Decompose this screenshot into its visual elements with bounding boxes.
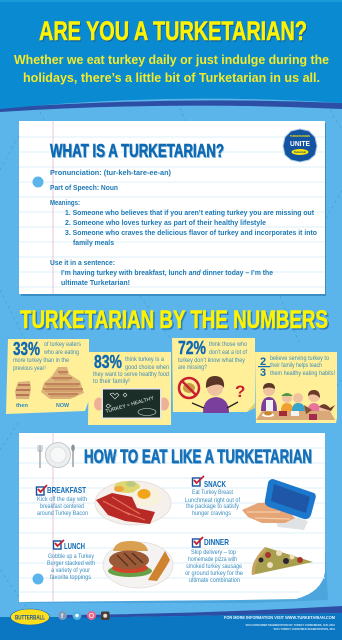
icon: no turkey sign xyxy=(179,378,199,398)
logo: butterball: BUTTERBALL xyxy=(15,614,45,622)
badge: turketarians unite: UNITE xyxy=(290,141,310,148)
lunch: favorite toppings xyxy=(50,574,91,581)
social icons xyxy=(58,611,110,620)
definition text: Meanings: xyxy=(50,198,80,207)
snack xyxy=(185,476,316,530)
logo: butterball xyxy=(10,609,50,625)
sticky note: 33%: who are eating xyxy=(43,349,79,356)
icon: large sandwich pile xyxy=(41,367,84,399)
sticky note: 83%: good choice when xyxy=(125,364,169,371)
sticky note: 33% xyxy=(6,339,89,414)
sticky note: 83%: to their family² xyxy=(93,378,130,385)
definition text: 3. Someone who craves the delicious flavor of turkey and incorporates it into xyxy=(65,228,317,237)
sticky note: 33%: 33% xyxy=(13,339,40,359)
sticky note: two thirds: their family helps teach xyxy=(270,362,322,369)
lunch: LUNCH xyxy=(64,541,85,551)
dinner: smoked turkey sausage xyxy=(186,563,242,570)
dinner: DINNER xyxy=(204,537,229,547)
fraction: 3 xyxy=(260,367,266,379)
breakfast: BREAKFAST xyxy=(47,485,87,495)
icon: checkbox xyxy=(192,537,203,547)
breakfast: Kick off the day with xyxy=(37,496,87,503)
lunch xyxy=(47,540,173,588)
labels: then and now: then xyxy=(16,403,28,409)
sticky note: 33%: more turkey than in the xyxy=(13,357,69,364)
sticky note: 83%: think turkey is a xyxy=(125,356,164,363)
definition text: I’m having turkey with breakfast, lunch and dinner today – I’m the xyxy=(61,268,273,277)
subtitle: holidays, there’s a little bit of Turketarian in us all. xyxy=(23,70,320,85)
sticky note: 33%: previous year¹ xyxy=(13,365,46,372)
snack: the package to satisfy xyxy=(186,503,239,510)
sticky note: 72%: think those who xyxy=(209,341,247,348)
icon: plate and cutlery xyxy=(38,442,75,468)
panel: what is a turketarian xyxy=(19,121,326,296)
header band xyxy=(0,0,342,112)
subtitle xyxy=(14,52,329,85)
lunch: Burger stacked with xyxy=(47,560,95,567)
labels: then and now: NOW xyxy=(56,403,69,409)
dinner xyxy=(185,537,313,584)
breakfast xyxy=(36,481,171,525)
photo: lunchmeat container xyxy=(242,479,316,530)
definition text: 1. Someone who believes that if you aren’t eating turkey you are missing out xyxy=(65,208,314,217)
footer text: ²2014 TURKEY CONSUMER SEGMENTATION, 2011 xyxy=(273,627,336,631)
definition text: Use it in a sentence: xyxy=(50,258,115,267)
definition text: Pronunciation: (tur-keh-tare-ee-an) xyxy=(50,168,171,177)
snack: hunger cravings xyxy=(192,510,231,517)
sticky note: two thirds: believe serving turkey to xyxy=(270,355,329,362)
sticky note: 72% xyxy=(172,338,255,413)
definition text: family meals xyxy=(73,238,114,247)
icon: checkbox xyxy=(192,476,204,486)
fraction xyxy=(258,356,270,379)
badge: turketarians unite: Butterball xyxy=(294,151,306,154)
sticky note: 72%: 72% xyxy=(178,338,206,358)
badge: turketarians unite: TURKETARIANS xyxy=(290,134,310,138)
snack: Lunchmeat right out of xyxy=(185,497,240,504)
sticky note: 83%: they want to serve healthy food xyxy=(93,371,169,378)
sticky note: 72%: are missing? xyxy=(178,364,207,371)
lunch: Gobble up a Turkey xyxy=(48,553,94,560)
dinner: Skip delivery – top xyxy=(191,549,236,556)
definition text: Part of Speech: Noun xyxy=(50,183,118,192)
sticky note: two thirds xyxy=(255,352,337,423)
subtitle: Whether we eat turkey daily or just indulge during the xyxy=(14,52,329,67)
definition text xyxy=(50,168,317,287)
sticky note: 83% xyxy=(88,352,171,425)
heading: WHAT IS A TURKETARIAN? xyxy=(50,141,224,161)
definition text: 2. Someone who loves turkey as part of their healthy lifestyle xyxy=(65,218,266,227)
sticky note: 72%: don’t eat a lot of xyxy=(209,349,247,356)
breakfast: breakfast centered xyxy=(40,503,84,510)
snack: SNACK xyxy=(204,479,227,489)
sticky note: 83%: 83% xyxy=(94,352,122,372)
heading: WHAT IS A TURKETARIAN? xyxy=(51,142,225,162)
lunch: a variety of your xyxy=(51,567,91,574)
panel: how to eat like a turketarian xyxy=(19,433,328,603)
icon: question mark: ? xyxy=(235,382,245,401)
icon: shrugging person xyxy=(192,376,238,413)
footer text: ¹2014 CONSUMER SEGMENTATION OF TURKEY CONSUMERS, AUG 2012 xyxy=(245,623,336,627)
photo: pizza slice xyxy=(252,547,313,575)
hole punch xyxy=(32,176,44,188)
snack: Eat Turkey Breast xyxy=(192,489,233,496)
dinner: ultimate combination xyxy=(189,577,240,584)
social icons: f xyxy=(61,613,64,620)
footer text xyxy=(224,615,336,631)
dinner: homemade pizza with xyxy=(188,556,237,563)
icon: checkbox xyxy=(36,485,47,495)
photo: turkey burger xyxy=(103,541,173,588)
sticky note: 33%: of turkey eaters xyxy=(44,341,81,348)
definition text: ultimate Turketarian! xyxy=(61,278,130,287)
sticky note: 72%: turkey don’t know what they xyxy=(178,357,246,364)
breakfast: around Turkey Bacon xyxy=(37,510,88,517)
badge: turketarians unite xyxy=(283,129,317,162)
icon: small sandwich pile xyxy=(15,381,31,399)
icon: checkbox xyxy=(54,540,64,549)
hole punch xyxy=(32,574,44,584)
icon: hands holding chalkboard: TURKEY = HEALTHY xyxy=(105,395,155,415)
footer band xyxy=(0,606,342,640)
dinner: or ground turkey for the xyxy=(185,570,243,577)
labels: then and now xyxy=(16,403,69,409)
photo: bacon and eggs xyxy=(95,481,171,525)
icon: family at table xyxy=(256,383,335,420)
fraction: 2 xyxy=(260,356,266,368)
